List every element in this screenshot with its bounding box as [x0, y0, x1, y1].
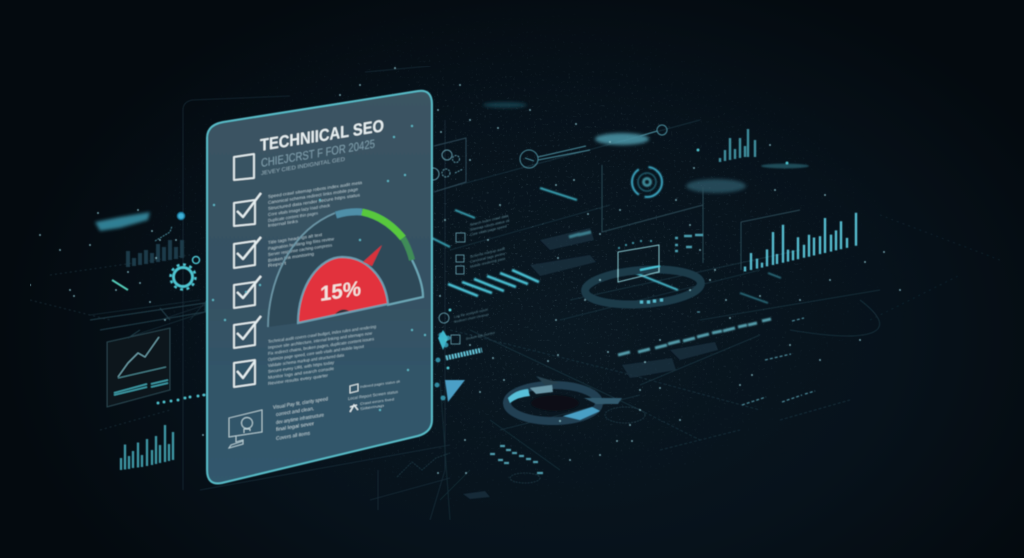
text block 3: Validate schema markup and structured data	[268, 352, 345, 368]
gauge segment blue	[336, 212, 362, 215]
text block 2: Server response caching compress	[268, 242, 332, 257]
mini text block upper	[470, 214, 510, 237]
text block 4: dev anytime infrastructure	[276, 412, 324, 426]
mini text block middle: Mobile rendering pass	[470, 257, 505, 269]
gauge backdrop	[268, 209, 423, 327]
legend block: Local Report Screen status	[348, 389, 398, 401]
circuit network lines	[30, 66, 1000, 520]
glow smear far right	[761, 164, 809, 168]
legend block: Sitemap	[360, 404, 384, 411]
mini text block upper: Sitemap robots status ok	[470, 219, 510, 232]
ring node icon	[520, 125, 667, 168]
glow smear right	[686, 179, 746, 193]
red dial	[298, 257, 388, 323]
bar chart: right	[745, 213, 856, 272]
panel: checklist card	[207, 91, 432, 483]
glow smear top centre	[483, 102, 527, 108]
text block 2: Pagination hreflang log files review	[268, 236, 335, 251]
left data strokes	[112, 280, 128, 290]
text block 1: Speed crawl sitemap robots index audit meta	[268, 180, 363, 199]
gauge value: 15%	[320, 277, 361, 306]
data strip	[446, 350, 482, 358]
text block 3: Monitor logs and search console	[268, 366, 335, 380]
text block 4: Visual Pay fit, clarity speed	[273, 396, 328, 411]
text block 3	[268, 324, 377, 386]
teal bright dots	[158, 150, 787, 403]
side icons	[439, 233, 465, 344]
softened artwork	[30, 66, 1000, 520]
gauge segment dark green	[403, 238, 412, 260]
scatter strip	[618, 319, 771, 355]
checkbox: checked 2	[234, 237, 261, 268]
subheading: CHIEJCRST F FOR 20425	[261, 137, 375, 170]
mini text block lower	[454, 308, 496, 341]
mini text block lower: Broken link monitor	[466, 330, 496, 341]
text block 1: Canonical schema redirect links mobile page	[268, 186, 359, 205]
text block 3: Optimize page speed, core web vitals and mobile layout	[268, 343, 365, 362]
heading: TECHNIICAL SEO	[260, 116, 384, 155]
mini text block middle: Schema markup audit	[470, 247, 505, 259]
text block 1	[268, 180, 363, 228]
line chart panel	[107, 328, 170, 407]
text block 2: Title tags headings alt text	[268, 232, 323, 245]
gauge	[268, 212, 423, 327]
text block 3: Review results every quarter	[268, 373, 329, 386]
text block 4: Covers all items	[276, 431, 310, 442]
text block 1: Core vitals image lazy load check	[268, 203, 331, 217]
monitor wireframe icon	[618, 241, 660, 282]
text block 3: Secure every URL with https today	[268, 360, 335, 374]
card surface	[207, 91, 432, 483]
tagline: JEVEY CIED INDIGNITAL GED	[261, 157, 345, 177]
text block 3: Improve site architecture, internal linking and sitemaps now	[268, 330, 373, 350]
gauge thin arc right	[387, 260, 423, 305]
dim bar silhouette left	[128, 240, 182, 267]
text block 1: Duplicate content thin pages	[268, 211, 318, 223]
checkbox: checked 5	[234, 360, 255, 387]
speckle texture	[188, 56, 812, 464]
dim loops	[397, 407, 645, 483]
triangle marker	[445, 380, 465, 402]
bright dashes lower right	[695, 312, 815, 405]
legend block	[348, 379, 400, 412]
gauge thin arc	[268, 213, 335, 327]
orbital ring	[584, 266, 702, 308]
droplet marker	[438, 330, 448, 350]
blue dot icon	[178, 212, 184, 220]
mini text block lower: Log file analysis report	[454, 308, 488, 319]
left smear	[95, 212, 150, 231]
bright data dashes	[430, 188, 781, 303]
mini text block middle	[470, 247, 505, 269]
circular target icon	[632, 167, 662, 197]
text block 4: correct and clean,	[276, 406, 314, 418]
donut chart	[507, 376, 622, 421]
mini text block upper: Core vitals page speed	[470, 224, 507, 237]
bar chart: lower left	[121, 425, 173, 470]
checkbox: empty	[234, 154, 254, 180]
checkbox: checked 1	[234, 193, 261, 226]
checkbox: checked 4	[234, 316, 261, 348]
right edge nodes	[437, 335, 448, 398]
gear icon	[170, 256, 200, 290]
text block 2: Report	[268, 260, 287, 268]
mini text block lower: Redirect chain cleanup	[454, 312, 489, 324]
legend icon bottom	[350, 405, 358, 412]
text block 4: final legal sever	[276, 421, 314, 433]
text block 4	[273, 396, 328, 442]
dim data blocks	[463, 228, 718, 499]
floating particles on card	[213, 126, 425, 410]
checkbox: checked 3	[234, 276, 261, 308]
dial pivot	[335, 310, 349, 314]
text block 2	[268, 232, 335, 268]
small node cluster	[675, 235, 703, 251]
line node	[155, 226, 172, 241]
text block 3: Fix redirect chains, broken pages, duplicate content issues	[268, 336, 374, 356]
gauge segment green	[362, 212, 403, 238]
isometric grid left	[90, 303, 205, 338]
legend text: Indexed pages status ok	[360, 379, 400, 389]
icon: monitor with bulb	[229, 410, 262, 448]
text block 1: Internal links	[268, 219, 298, 228]
gears frame	[427, 138, 466, 192]
legend icon top	[350, 384, 358, 393]
mini text block middle: Canonical tags review	[470, 252, 505, 264]
mini text block upper: Search index crawl data	[470, 214, 509, 227]
text block 2: Broken link monitoring	[268, 251, 315, 263]
glow smear top	[595, 133, 649, 145]
dots cluster	[490, 446, 543, 473]
scattered data points	[30, 68, 900, 473]
text block 1: Structured data render secure https status	[268, 192, 360, 211]
bar chart: upper right	[720, 129, 755, 162]
text block 3: Technical audit covers crawl budget, index rules and rendering	[268, 324, 377, 344]
legend block: Crawl errors fixed	[360, 397, 394, 406]
red needle	[363, 245, 382, 266]
wireframe frame	[602, 165, 800, 270]
